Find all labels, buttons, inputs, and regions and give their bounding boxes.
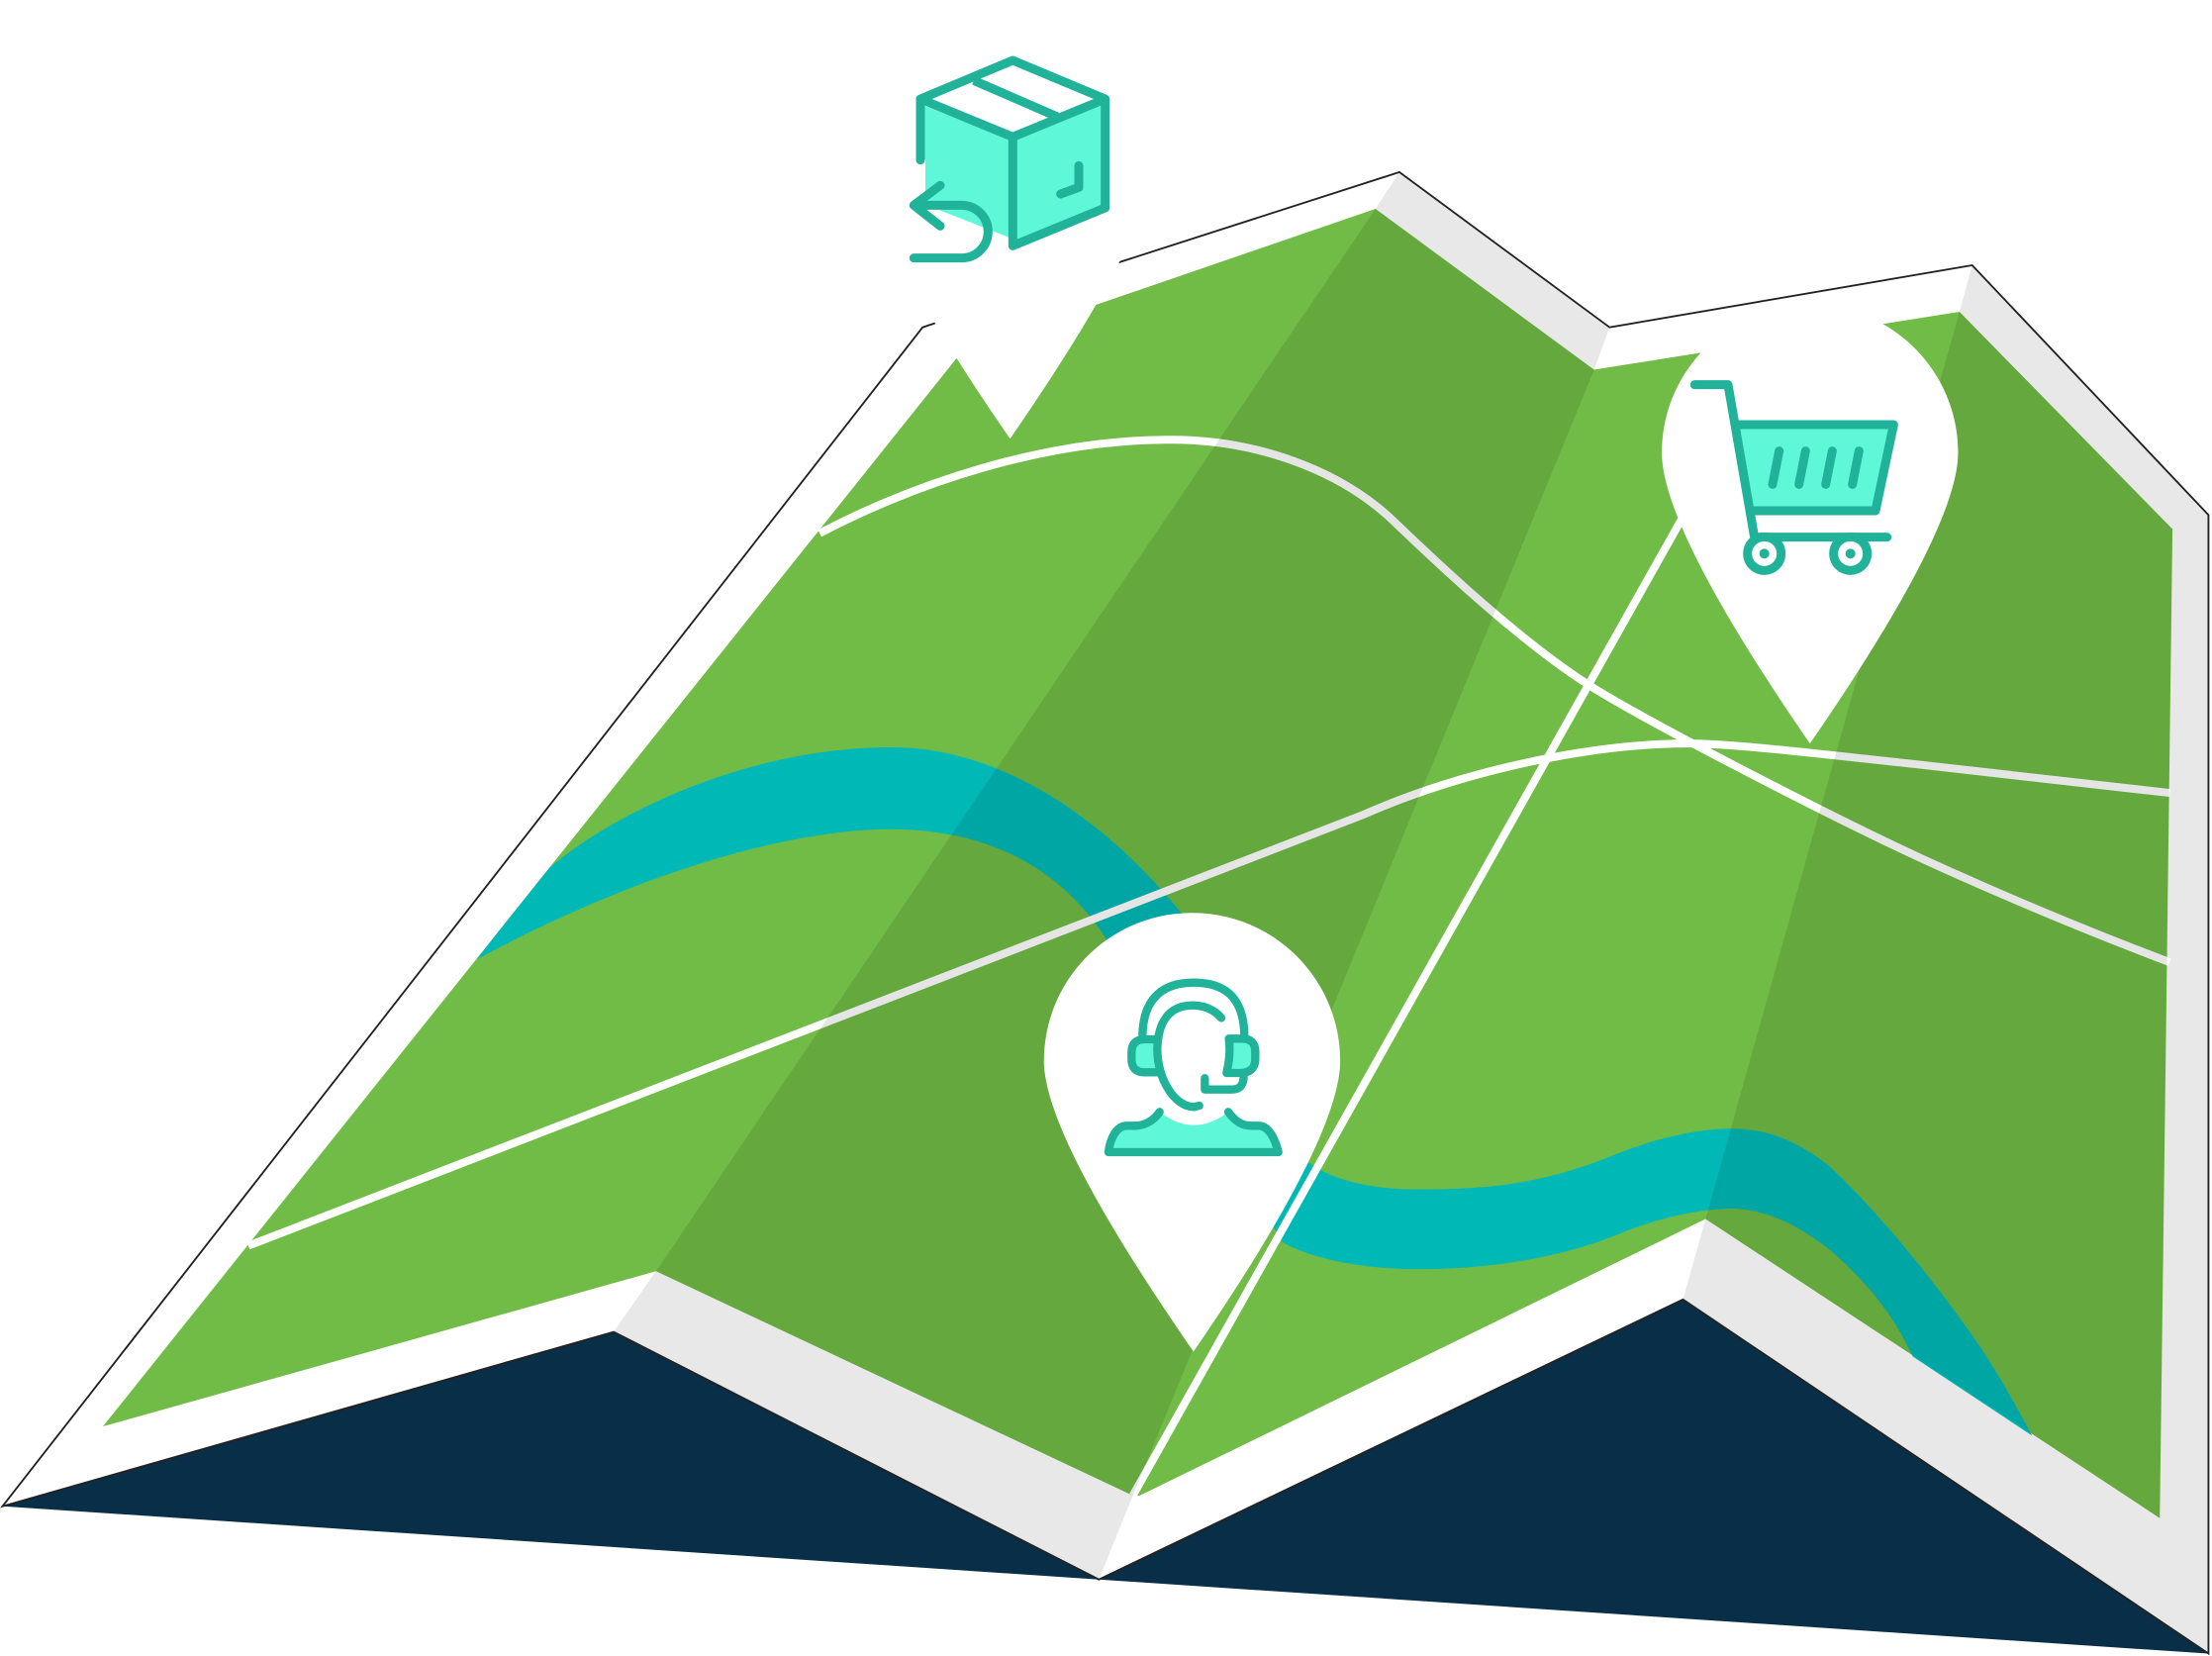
green land [103,209,2172,1518]
location pin: shopping [1662,305,1958,743]
white roads [248,439,2169,1496]
icon: support agent headset [1108,983,1279,1152]
navy map shadow [3,1300,2208,1654]
icon: shopping cart [1694,385,1893,570]
teal river [477,747,2037,1445]
grey fold shading [614,172,2208,1654]
darker map folds [656,209,2172,1518]
icon: return box [914,60,1106,258]
location pin: returns [862,0,1158,438]
location pin: support [1044,913,1340,1352]
